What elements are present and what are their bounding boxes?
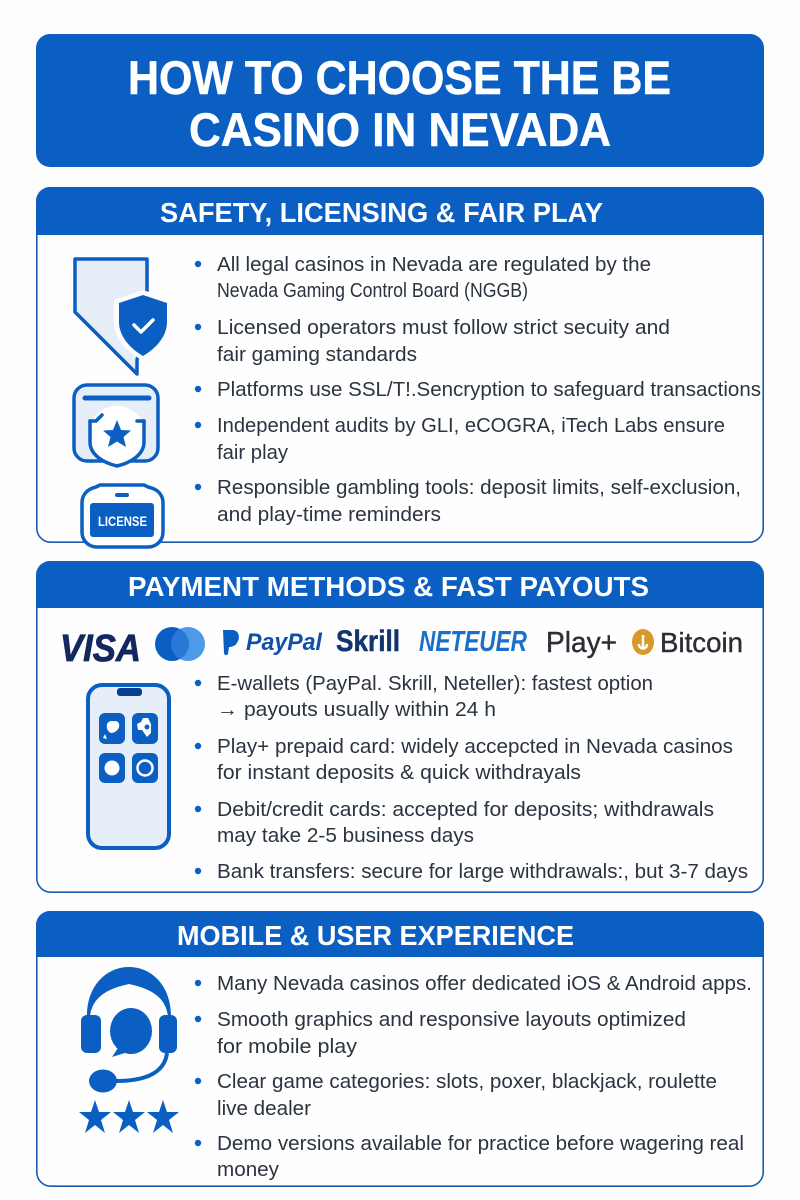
icon: smartphone with apps: [88, 685, 169, 848]
text block: safety bullets: Nevada Gaming Control Board (NGGB): [217, 279, 528, 302]
title banner: HOW TO CHOOSE THE BE: [128, 51, 671, 104]
heading: safety: SAFETY, LICENSING & FAIR PLAY: [160, 197, 603, 228]
logo: Neteller: NETEUER: [419, 626, 527, 658]
logo: Skrill: Skrill: [336, 625, 400, 658]
logo: Visa: VISA: [60, 628, 141, 670]
text block: mobile bullets: Demo versions available for practice before wagering real: [217, 1132, 744, 1155]
logo: PayPal: PayPal: [246, 629, 323, 656]
heading: safety: [36, 187, 764, 235]
heading: payment: [36, 561, 764, 608]
text block: mobile bullets: Smooth graphics and responsive layouts optimized: [217, 1008, 686, 1031]
heading: mobile: MOBILE & USER EXPERIENCE: [177, 920, 574, 951]
text block: mobile bullets: for mobile play: [217, 1035, 358, 1058]
text block: safety bullets: Licensed operators must follow strict secuity and: [217, 316, 670, 339]
panel: payment methods and fast payouts: [36, 561, 764, 892]
text block: payment bullets: [195, 672, 748, 883]
icon: Nevada map with shield: [75, 259, 172, 374]
icon: license card: [82, 485, 163, 547]
text block: safety bullets: and play-time reminders: [217, 503, 441, 526]
title banner: CASINO IN NEVADA: [189, 103, 611, 156]
logo: Play+: Play+: [546, 627, 617, 659]
text block: mobile bullets: live dealer: [217, 1097, 311, 1120]
panel: safety, licensing and fair play: [36, 187, 764, 547]
icon: headset with chat bubble: [81, 967, 177, 1092]
text block: mobile bullets: money: [217, 1158, 280, 1181]
text block: safety bullets: Platforms use SSL/T!.Sencryption to safeguard transactions: [217, 378, 761, 401]
title banner: [36, 34, 764, 167]
text block: payment bullets: may take 2-5 business days: [217, 824, 474, 847]
text block: mobile bullets: Clear game categories: slots, poxer, blackjack, roulette: [217, 1070, 717, 1093]
text block: payment bullets: Bank transfers: secure for large withdrawals:, but 3-7 days: [217, 860, 748, 883]
heading: mobile: [36, 911, 764, 957]
text block: payment bullets: → payouts usually within 24 h: [217, 698, 496, 721]
icon: license card: LICENSE: [98, 514, 147, 529]
text block: mobile bullets: Many Nevada casinos offer dedicated iOS & Android apps.: [217, 972, 752, 995]
icon: three rating stars: [79, 1100, 179, 1133]
text block: payment bullets: for instant deposits & quick withdrayals: [217, 761, 581, 784]
text block: safety bullets: Independent audits by GLI, eCOGRA, iTech Labs ensure: [217, 414, 725, 437]
text block: payment bullets: E-wallets (PayPal. Skrill, Neteller): fastest option: [217, 672, 653, 695]
logo row: payment brands: [60, 625, 743, 670]
panel: mobile and user experience: [36, 911, 764, 1186]
text block: safety bullets: All legal casinos in Nevada are regulated by the: [217, 253, 651, 276]
logo: Mastercard circles: [155, 627, 205, 661]
text block: mobile bullets: [195, 972, 752, 1181]
text block: safety bullets: fair play: [217, 441, 289, 464]
text block: safety bullets: Responsible gambling tools: deposit limits, self-exclusion,: [217, 476, 741, 499]
text block: safety bullets: fair gaming standards: [217, 343, 417, 366]
text block: payment bullets: Debit/credit cards: accepted for deposits; withdrawals: [217, 798, 714, 821]
logo: Bitcoin: Bitcoin: [660, 627, 743, 658]
icon: certificate badge with star: [74, 385, 158, 468]
text block: safety bullets: [195, 253, 761, 526]
heading: payment: PAYMENT METHODS & FAST PAYOUTS: [128, 571, 649, 602]
text block: payment bullets: Play+ prepaid card: widely accepcted in Nevada casinos: [217, 735, 733, 758]
